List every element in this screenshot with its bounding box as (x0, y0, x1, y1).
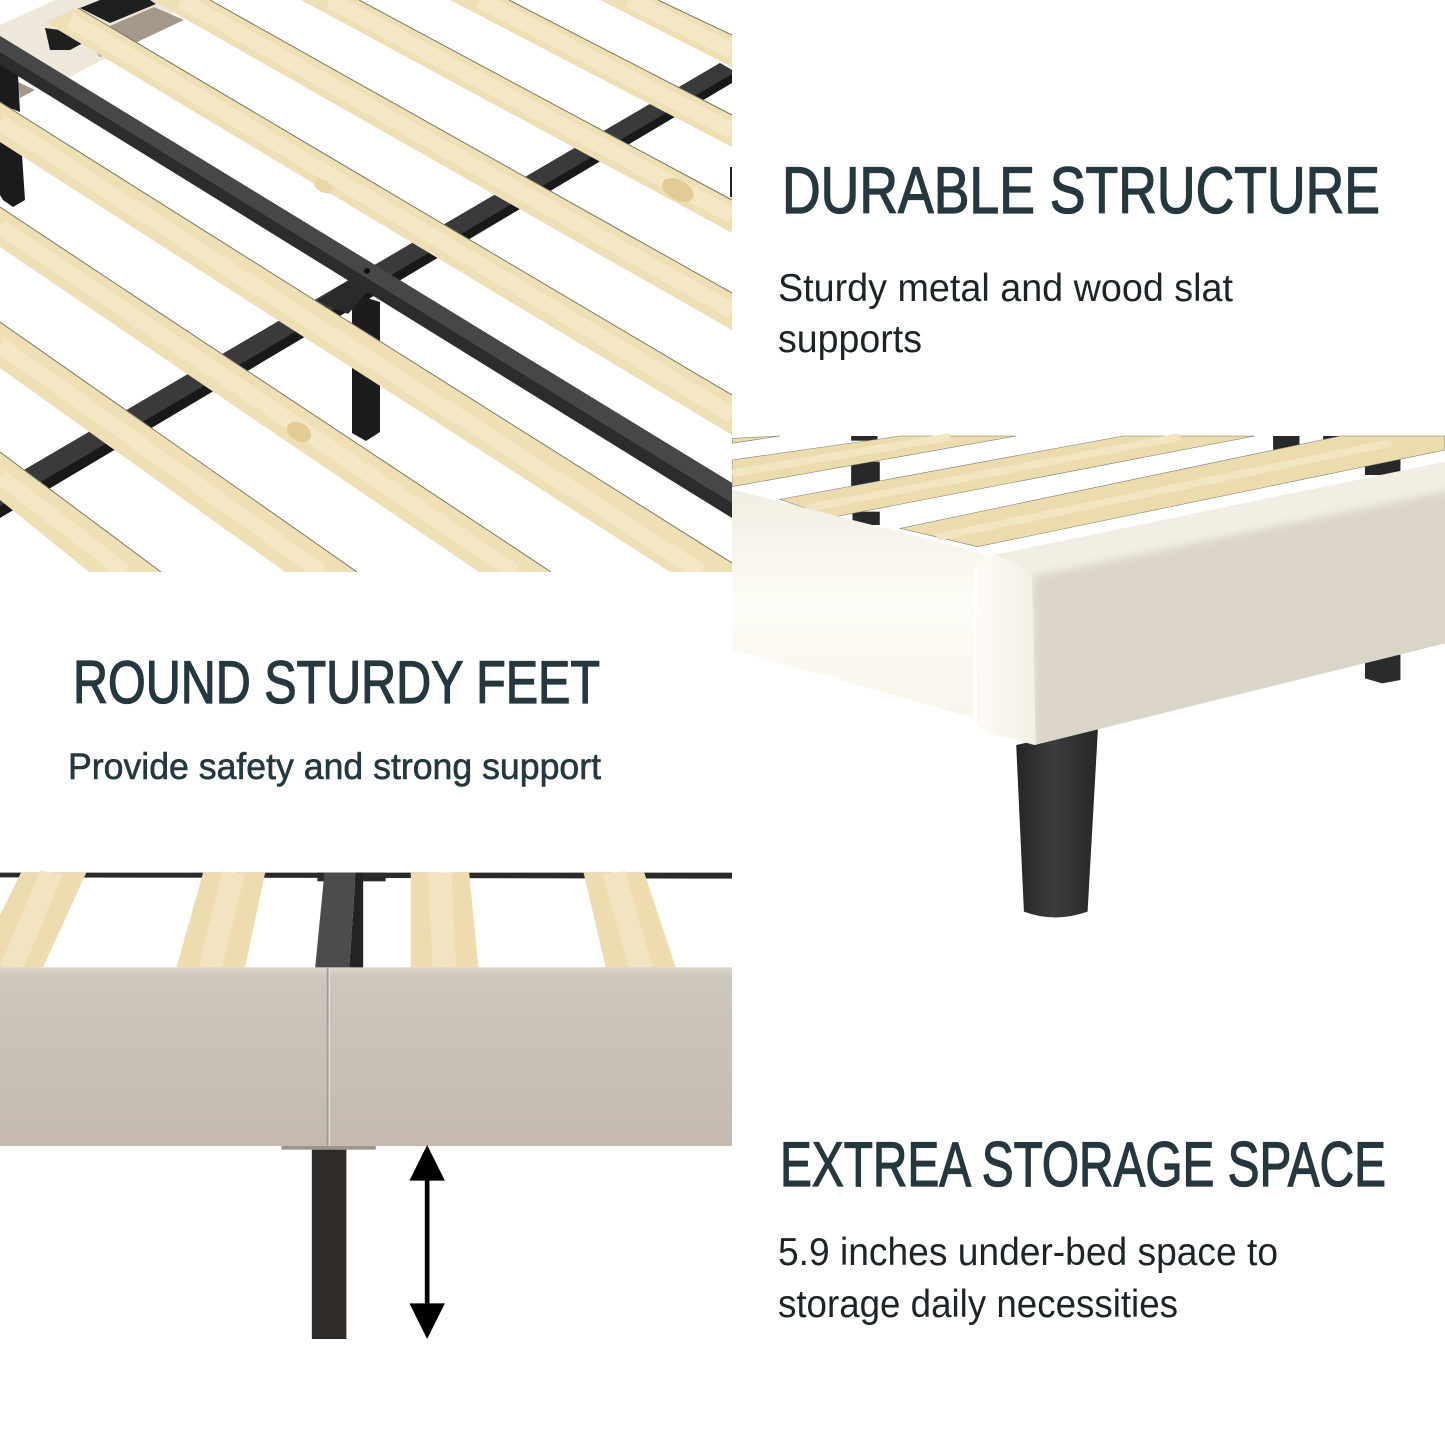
wood grain bands (12, 873, 641, 968)
wood knots (283, 173, 698, 446)
text block: durable structure description: Sturdy metal and wood slat (778, 267, 1233, 310)
wood grain bands (732, 437, 1391, 537)
arrow: clearance height (409, 1145, 445, 1339)
centre bracket (317, 281, 369, 314)
centre metal support (315, 873, 363, 968)
text block: storage description: storage daily necessities (778, 1283, 1178, 1326)
frame side panel (0, 967, 732, 1146)
text block: durable structure description: supports (778, 318, 922, 361)
black cross bar (0, 63, 732, 518)
rear black rail (0, 873, 732, 879)
panel: upholstered corner and round foot (732, 433, 1445, 918)
rear centre bracket (317, 873, 386, 881)
beige headboard corner (0, 0, 190, 98)
wood slats (732, 436, 1445, 547)
round foot (1016, 727, 1098, 918)
wood slats (0, 873, 676, 968)
text block: storage description (778, 1231, 1278, 1326)
panel: side view of frame and height arrow (0, 870, 732, 1339)
slat top edge shadows (0, 0, 732, 572)
right frame board (978, 462, 1445, 763)
left frame board (732, 489, 986, 717)
foot bracket (282, 1146, 376, 1150)
far rear leg (1365, 645, 1400, 683)
centre leg (352, 293, 380, 441)
left legs (0, 60, 25, 207)
right edge leg sliver (730, 167, 732, 197)
wood grain bands (0, 0, 732, 572)
heading: round sturdy feet: ROUND STURDY FEET (73, 649, 600, 716)
text block: round sturdy feet description: Provide safety and strong support (68, 746, 602, 787)
wood slats (0, 0, 732, 572)
rear legs behind slats (851, 436, 1400, 525)
text block: storage description: 5.9 inches under-bed space to (778, 1231, 1278, 1274)
square leg (312, 1150, 346, 1339)
text block: durable structure description (778, 267, 1233, 361)
panel: slats from above (0, 0, 732, 572)
long metal bar (0, 36, 732, 518)
